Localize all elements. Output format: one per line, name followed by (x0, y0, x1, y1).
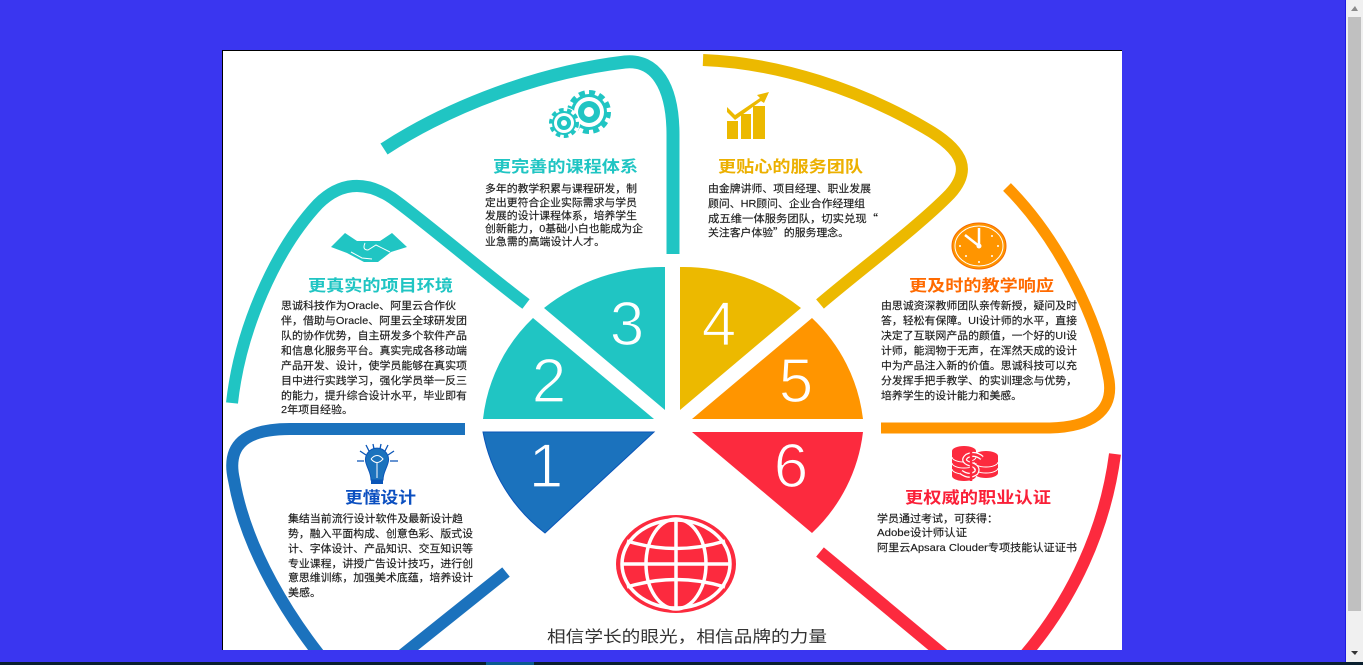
heading: service team: 更贴心的服务团队 (718, 157, 863, 176)
text: teaching response: 分发挥手把手教学、的实训理念与优势， (881, 374, 1077, 387)
scrollbar (1345, 0, 1363, 662)
text: certification (877, 512, 1077, 554)
sector 5 (692, 318, 863, 419)
sector 6: 6 (774, 432, 808, 501)
text: design (288, 512, 474, 599)
text: course system: 多年的教学积累与课程研发，制 (485, 182, 637, 195)
taskbar strip (0, 662, 1363, 665)
text: design: 势，融入平面构成、创意色彩、版式设 (288, 527, 474, 540)
heading: course system: 更完善的课程体系 (493, 157, 638, 176)
text: teaching response: 计师，能润物于无声，在浑然天成的设计 (881, 344, 1078, 357)
text: service team: 顾问、HR顾问、企业合作经理组 (708, 197, 866, 210)
text: teaching response: 培养学生的设计能力和美感。 (881, 389, 1022, 402)
text: certification: 阿里云Apsara Clouder专项技能认证证书 (877, 541, 1077, 554)
ribbon 6 red (820, 454, 1115, 656)
icon: globe (616, 515, 736, 613)
sector 3: 3 (610, 290, 644, 359)
text: service team: 成五维一体服务团队，切实兑现 “ (708, 211, 879, 226)
sector 1 (483, 432, 654, 533)
text: course system: 业急需的高端设计人才。 (485, 235, 605, 248)
text: course system (485, 182, 644, 248)
text: certification: Adobe设计师认证 (877, 526, 968, 539)
text: design: 计、字体设计、产品知识、交互知识等 (288, 542, 474, 555)
icon: clock (952, 223, 1006, 269)
ribbon 2 teal (232, 186, 526, 403)
text: course system: 创新能力，0基础小白也能成为企 (485, 222, 644, 235)
text: project environment: 目中进行实践学习，强化学员举一反三 (281, 374, 467, 387)
heading: certification: 更权威的职业认证 (905, 488, 1051, 507)
text: teaching response: 中为产品注入新的价值。思诚科技可以充 (881, 359, 1078, 372)
text: teaching response (881, 299, 1078, 402)
text: project environment: 和信息化服务平台。真实完成各移动端 (281, 344, 468, 357)
text: design: 专业课程，讲授广告设计技巧，进行创 (288, 557, 473, 570)
sector 1: 1 (529, 432, 563, 501)
icon: handshake (331, 233, 407, 262)
text: course system: 发展的设计课程体系，培养学生 (485, 209, 637, 222)
text: course system: 定出更符合企业实际需求与学员 (485, 196, 637, 209)
sector 2: 2 (532, 347, 566, 416)
sector 2 (483, 318, 654, 419)
text: teaching response: 由思诚资深教师团队亲传新授，疑问及时 (881, 299, 1078, 312)
sector 3 (544, 267, 665, 410)
text: project environment: 2年项目经验。 (281, 403, 353, 416)
text: project environment (281, 299, 468, 416)
heading: project environment: 更真实的项目环境 (308, 276, 453, 295)
text: service team: 关注客户体验”的服务理念。 (708, 225, 849, 240)
caption: 相信学长的眼光，相信品牌的力量 (547, 628, 827, 646)
text: design: 意思维训练，加强美术底蕴，培养设计 (288, 571, 474, 584)
text: service team (708, 182, 879, 240)
text: project environment: 产品开发、设计，使学员能够在真实项 (281, 359, 468, 372)
ribbon 4 yellow (703, 60, 962, 304)
text: project environment: 思诚科技作为Oracle、阿里云合作伙 (281, 299, 457, 312)
heading: teaching response: 更及时的教学响应 (909, 276, 1054, 295)
text: design: 美感。 (288, 586, 321, 599)
heading: design: 更懂设计 (345, 488, 416, 507)
text: design: 集结当前流行设计软件及最新设计趋 (288, 512, 464, 525)
sector 5: 5 (779, 347, 813, 416)
icon: light bulb (357, 444, 398, 484)
icon: coins (952, 446, 998, 481)
icon: gears (548, 92, 608, 139)
ribbon 1 blue (232, 429, 506, 665)
text: project environment: 伴，借助与Oracle、阿里云全球研发团 (281, 314, 467, 327)
text: teaching response: 答，轻松有保障。UI设计师的水平，直接 (881, 314, 1078, 327)
sector 4: 4 (702, 290, 736, 359)
infographic panel (222, 50, 1122, 665)
text: project environment: 的能力，提升综合设计水平，毕业即有 (281, 389, 467, 402)
sector 4 (680, 267, 801, 410)
text: teaching response: 决定了互联网产品的颜值，一个好的UI设 (881, 329, 1078, 342)
icon: growth chart (727, 92, 769, 139)
text: certification: 学员通过考试，可获得： (877, 512, 998, 525)
text: project environment: 队的协作优势，自主研发多个软件产品 (281, 329, 467, 342)
text: service team: 由金牌讲师、项目经理、职业发展 (708, 182, 872, 195)
ribbon 5 orange (881, 187, 1110, 428)
ribbon 3 teal (384, 62, 673, 254)
sector 6 (692, 432, 863, 533)
